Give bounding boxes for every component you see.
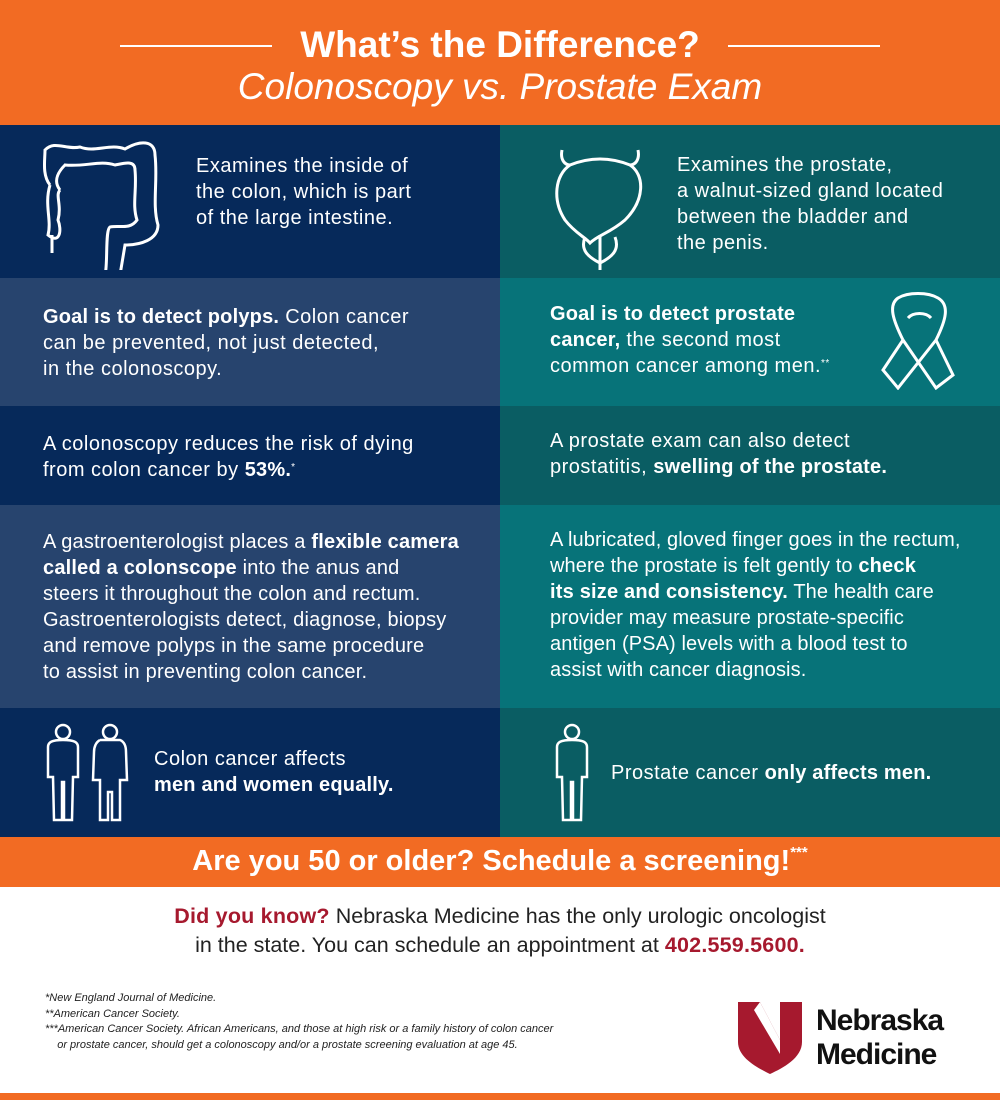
text: did you know <box>174 904 826 957</box>
text: prostate procedure: its size and consistency. The health care <box>550 581 934 603</box>
icon: man and woman <box>46 724 128 822</box>
icon: colon <box>43 141 160 270</box>
logo: Nebraska Medicine: Nebraska <box>816 1004 943 1037</box>
text: colon intro: of the large intestine. <box>196 207 393 229</box>
subtitle: Colonoscopy vs. Prostate Exam <box>238 66 762 107</box>
text: prostate intro: the penis. <box>677 232 769 254</box>
text: did you know: Did you know? Nebraska Medicine has the only urologic oncologist <box>174 904 826 928</box>
text: colon goal: Goal is to detect polyps. Colon cancer <box>43 306 409 328</box>
text: colon cancer affects <box>154 748 394 796</box>
text: colon intro: Examines the inside of <box>196 155 408 177</box>
footnotes: **American Cancer Society. <box>45 1008 180 1020</box>
text: colon goal <box>43 306 409 380</box>
text: prostatitis <box>550 430 887 478</box>
text: colonoscopy procedure: to assist in preventing colon cancer. <box>43 661 367 683</box>
banner: schedule <box>0 837 1000 887</box>
logo: Nebraska Medicine <box>738 1002 944 1074</box>
text: colon goal: in the colonoscopy. <box>43 358 222 380</box>
text: prostate procedure: assist with cancer diagnosis. <box>550 659 806 681</box>
text: colonoscopy procedure: called a colonscope into the anus and <box>43 557 400 579</box>
text: prostate goal: common cancer among men.** <box>550 355 830 377</box>
text: colonoscopy risk: A colonoscopy reduces the risk of dying <box>43 433 414 455</box>
footnotes: ***American Cancer Society. African Americans, and those at high risk or a family history of colon cancer <box>45 1023 553 1035</box>
text: colon cancer affects: men and women equally. <box>154 774 394 796</box>
header <box>0 0 1000 125</box>
text: colon cancer affects: Colon cancer affects <box>154 748 346 770</box>
text: colon goal: can be prevented, not just detected, <box>43 332 379 354</box>
text: did you know: in the state. You can schedule an appointment at 402.559.5600. <box>195 933 805 957</box>
footnotes: *New England Journal of Medicine. <box>45 992 216 1004</box>
text: prostate procedure <box>550 529 960 681</box>
bottom strip <box>0 1093 1000 1100</box>
icon: ribbon <box>881 292 955 390</box>
text: prostatitis: prostatitis, swelling of the prostate. <box>550 456 887 478</box>
right column backgrounds <box>500 125 1000 837</box>
logo: Nebraska Medicine: Medicine <box>816 1038 936 1071</box>
footnotes <box>45 992 554 1050</box>
footnotes: or prostate cancer, should get a colonoscopy and/or a prostate screening evaluation at age 45. <box>57 1038 518 1050</box>
text: prostate goal: cancer, the second most <box>550 329 781 351</box>
text: prostate goal: Goal is to detect prostate <box>550 303 795 325</box>
text: prostate procedure: antigen (PSA) levels with a blood test to <box>550 633 908 655</box>
text: prostate procedure: provider may measure prostate-specific <box>550 607 904 629</box>
text: prostate intro: a walnut-sized gland located <box>677 180 943 202</box>
text: colonoscopy procedure: steers it throughout the colon and rectum. <box>43 583 421 605</box>
text: colonoscopy procedure: Gastroenterologists detect, diagnose, biopsy <box>43 609 446 631</box>
text: colonoscopy risk: from colon cancer by 53%.* <box>43 459 296 481</box>
text: colonoscopy procedure: and remove polyps in the same procedure <box>43 635 424 657</box>
banner: schedule: Are you 50 or older? Schedule a screening!*** <box>192 844 808 877</box>
text: colonoscopy procedure <box>43 531 459 683</box>
text: colonoscopy procedure: A gastroenterologist places a flexible camera <box>43 531 459 553</box>
text: prostate intro: between the bladder and <box>677 206 909 228</box>
text: prostate affects: Prostate cancer only affects men. <box>611 762 931 784</box>
text: prostate intro: Examines the prostate, <box>677 154 893 176</box>
text: prostate intro <box>677 154 943 254</box>
title: What’s the Difference? <box>300 24 700 65</box>
left column backgrounds <box>0 125 500 837</box>
text: colonoscopy risk <box>43 433 414 481</box>
icon: man <box>556 724 588 822</box>
text: colon intro <box>196 155 411 229</box>
text: colon intro: the colon, which is part <box>196 181 411 203</box>
text: prostate goal <box>550 303 830 377</box>
text: prostatitis: A prostate exam can also detect <box>550 430 850 452</box>
text: prostate procedure: where the prostate is felt gently to check <box>550 555 916 577</box>
text: prostate procedure: A lubricated, gloved finger goes in the rectum, <box>550 529 960 551</box>
icon: prostate <box>555 150 642 270</box>
